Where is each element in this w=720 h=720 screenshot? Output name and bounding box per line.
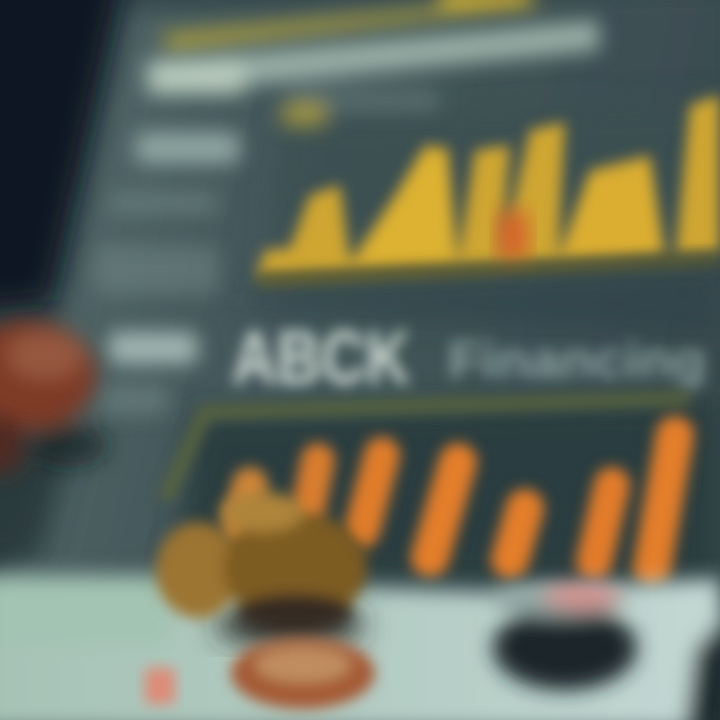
bar chart: yellow area chart — [258, 95, 720, 278]
hand at left edge — [0, 320, 108, 475]
label: Financing: Financing — [448, 332, 706, 390]
icon: coin on table — [231, 637, 375, 709]
chart baseline — [258, 254, 720, 286]
left column blurred text blocks — [95, 132, 240, 415]
icon: stacked coins — [156, 492, 367, 630]
bar chart: red highlight — [498, 212, 528, 260]
lower chart frame — [165, 398, 690, 500]
large label: ABCK: ABCK — [232, 316, 410, 401]
shadow under coins — [215, 605, 365, 645]
dark left corner — [0, 0, 125, 570]
heading: blurred title bar — [145, 20, 600, 126]
bar chart: orange bars — [240, 435, 675, 568]
top yellow strip — [160, 0, 540, 52]
icon: dark dish — [492, 584, 637, 690]
panel: darker lower chart area — [175, 100, 720, 590]
table surface — [0, 575, 720, 720]
icon: red mark on table — [145, 668, 175, 704]
